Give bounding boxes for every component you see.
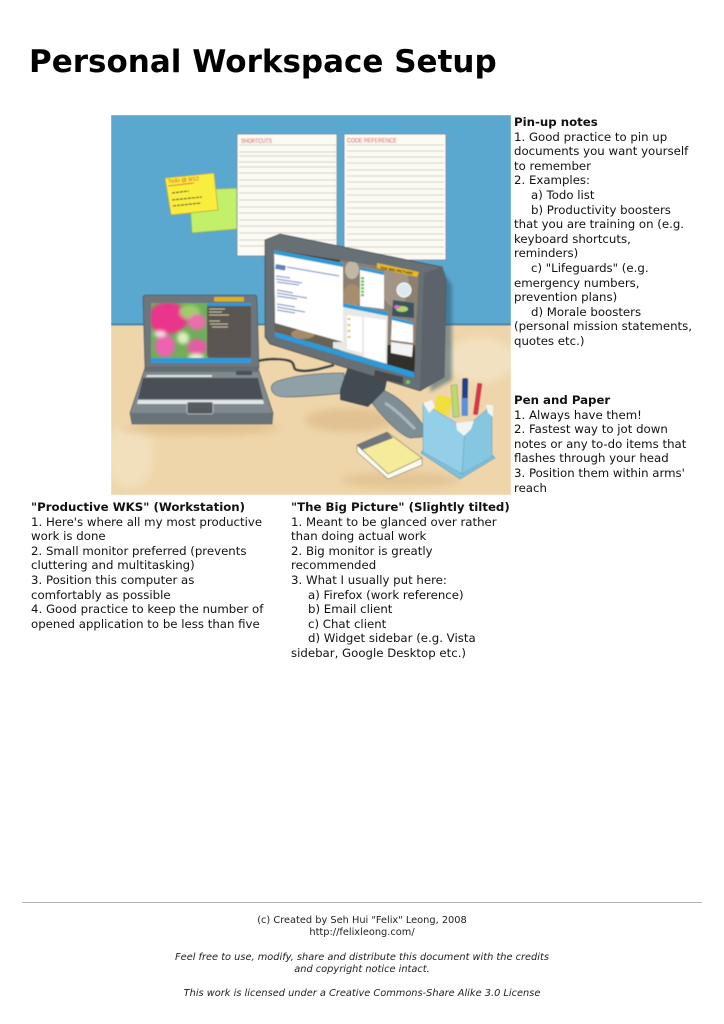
footer: credits: Feel free to use, modify, share and distribute this document with the credits bbox=[175, 952, 549, 963]
pin-up sheet: shortcuts: SHORTCUTS bbox=[241, 138, 273, 145]
monitor wallpaper bbox=[339, 260, 420, 364]
text block: pin-up notes: that you are training on (e.g. bbox=[514, 217, 684, 231]
text block: the big picture: than doing actual work bbox=[291, 529, 426, 543]
text block: pin-up notes: documents you want yourself bbox=[514, 144, 688, 158]
text block: the big picture: b) Email client bbox=[308, 602, 392, 616]
footer: credits: (c) Created by Seh Hui "Felix" Leong, 2008 bbox=[257, 915, 467, 926]
text block: the big picture: sidebar, Google Desktop etc.) bbox=[291, 646, 466, 660]
text block: productive workstation: opened application to be less than five bbox=[31, 617, 260, 631]
text block: productive workstation bbox=[31, 500, 264, 631]
text block: the big picture: a) Firefox (work reference) bbox=[308, 588, 464, 602]
text block: pin-up notes: reminders) bbox=[514, 246, 578, 260]
pen holder bbox=[421, 400, 495, 479]
text block: pin-up notes: c) "Lifeguards" (e.g. bbox=[531, 261, 649, 275]
text block: productive workstation: 1. Here's where all my most productive bbox=[31, 515, 262, 529]
text block: pin-up notes: emergency numbers, bbox=[514, 276, 640, 290]
monitor shadow on wall bbox=[430, 268, 452, 392]
text block: pin-up notes: prevention plans) bbox=[514, 290, 617, 304]
footer: credits: http://felixleong.com/ bbox=[309, 927, 415, 938]
text block: pin-up notes: 1. Good practice to pin up bbox=[514, 130, 667, 144]
widget sidebar bbox=[391, 283, 414, 357]
browser window bbox=[274, 250, 343, 342]
pin-up note: green sticky bbox=[189, 188, 238, 233]
text block: pin-up notes: Pin-up notes bbox=[514, 115, 598, 129]
laptop base bbox=[130, 368, 273, 424]
text block: the big picture: 2. Big monitor is greatly bbox=[291, 544, 433, 558]
notepad bbox=[357, 432, 422, 479]
text block: the big picture: 1. Meant to be glanced over rather bbox=[291, 515, 497, 529]
text block: pin-up notes: d) Morale boosters bbox=[531, 305, 641, 319]
text block: pin-up notes: (personal mission statements, bbox=[514, 319, 692, 333]
monitor stand bbox=[271, 366, 423, 438]
laptop terminal bbox=[207, 303, 251, 356]
text block: pen and paper: notes or any to-do items that bbox=[514, 437, 686, 451]
pin-up note: yellow todo sticky: Todo @ 9/12 bbox=[168, 176, 199, 185]
text block: productive workstation: 4. Good practice to keep the number of bbox=[31, 602, 263, 616]
text block: the big picture: 3. What I usually put here: bbox=[291, 573, 447, 587]
text block: pin-up notes: a) Todo list bbox=[531, 188, 595, 202]
text block: productive workstation: cluttering and multitasking) bbox=[31, 558, 195, 572]
text block: the big picture bbox=[291, 500, 510, 660]
email window bbox=[333, 303, 388, 364]
title: Personal Workspace Setup bbox=[29, 44, 497, 80]
footer: credits bbox=[175, 915, 549, 999]
cable bbox=[258, 359, 334, 371]
pin-up sheet: code reference: CODE REFERENCE bbox=[347, 138, 398, 144]
text block: pin-up notes: quotes etc.) bbox=[514, 334, 584, 348]
text block: pen and paper: flashes through your head bbox=[514, 451, 669, 465]
text block: productive workstation: work is done bbox=[31, 529, 106, 543]
text block: pen and paper: Pen and Paper bbox=[514, 393, 610, 407]
laptop photo: pink flower bbox=[148, 302, 208, 360]
text block: productive workstation: "Productive WKS" (Workstation) bbox=[31, 500, 245, 514]
text block: pen and paper: 3. Position them within arms' bbox=[514, 466, 685, 480]
pin-up sheet: code reference bbox=[344, 134, 446, 260]
pin-up note: yellow todo sticky bbox=[165, 173, 218, 215]
text block: pen and paper: reach bbox=[514, 481, 547, 495]
text block: the big picture: "The Big Picture" (Slightly tilted) bbox=[291, 500, 510, 514]
text block: the big picture: recommended bbox=[291, 558, 376, 572]
text block: pen and paper: 2. Fastest way to jot down bbox=[514, 422, 668, 436]
text block: pin-up notes: to remember bbox=[514, 159, 591, 173]
text block: productive workstation: 2. Small monitor preferred (prevents bbox=[31, 544, 246, 558]
text block: the big picture: c) Chat client bbox=[308, 617, 386, 631]
text block: pin-up notes: keyboard shortcuts, bbox=[514, 232, 631, 246]
laptop label bbox=[214, 297, 244, 302]
taskbar bbox=[275, 332, 414, 379]
pin-up sheet: shortcuts bbox=[237, 134, 337, 256]
laptop bbox=[130, 295, 273, 424]
text block: pin-up notes bbox=[514, 115, 692, 348]
text block: pen and paper: 1. Always have them! bbox=[514, 408, 642, 422]
pens bbox=[433, 378, 482, 417]
text block: the big picture: d) Widget sidebar (e.g. Vista bbox=[308, 631, 476, 645]
monitor bbox=[265, 234, 446, 391]
illustration: desk workspace bbox=[111, 115, 511, 495]
wall bbox=[111, 115, 511, 325]
desk bbox=[106, 324, 515, 495]
text block: pin-up notes: 2. Examples: bbox=[514, 173, 590, 187]
text block: pin-up notes: b) Productivity boosters bbox=[531, 203, 671, 217]
text block: pen and paper bbox=[514, 393, 686, 495]
text block: productive workstation: comfortably as possible bbox=[31, 588, 171, 602]
footer: credits: This work is licensed under a Creative Commons-Share Alike 3.0 License bbox=[184, 988, 540, 999]
monitor label bbox=[377, 263, 419, 277]
text block: productive workstation: 3. Position this computer as bbox=[31, 573, 194, 587]
monitor: THE BIG PICTURE bbox=[380, 266, 414, 276]
chat window bbox=[360, 267, 384, 309]
footer: credits: and copyright notice intact. bbox=[294, 964, 430, 975]
